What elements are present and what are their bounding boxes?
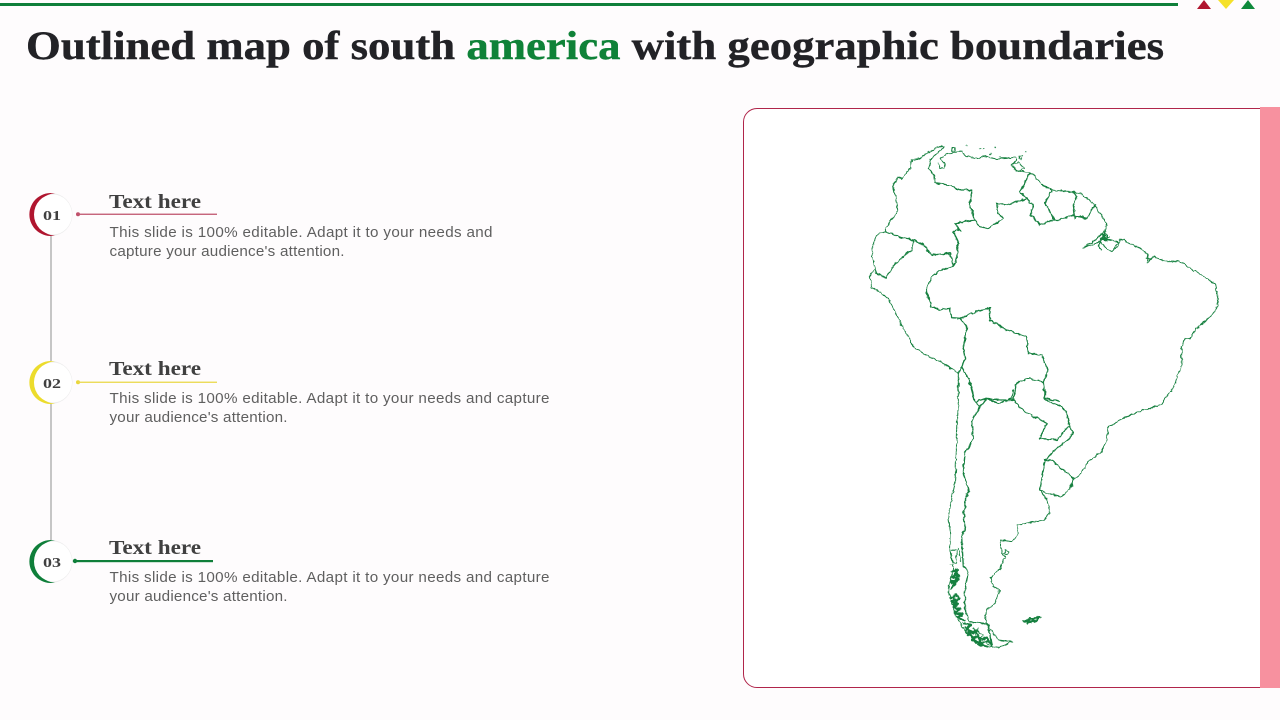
body text 01: capture your audience's attention. (110, 243, 344, 260)
marker 02 (29, 361, 72, 404)
body text 01: This slide is 100% editable. Adapt it to your needs and (110, 224, 492, 241)
marker 03: 03 (43, 556, 61, 571)
title: Outlined map of south america with geographic boundaries (26, 23, 1164, 68)
body text 03: This slide is 100% editable. Adapt it to your needs and capture (110, 569, 550, 586)
Amazon delta (1093, 232, 1151, 262)
pink side bar (1260, 107, 1280, 688)
northern half of the map (869, 146, 1218, 405)
Caribbean islands (952, 146, 1026, 171)
body text 02: your audience's attention. (110, 409, 288, 426)
top green rule (0, 3, 1178, 6)
timeline connector (50, 235, 52, 541)
body text 02 (110, 390, 550, 426)
connector line 03 (73, 559, 213, 563)
coastline south (948, 373, 1161, 648)
item 01 (29, 191, 492, 260)
marker 01: 01 (43, 209, 61, 224)
body text 03: your audience's attention. (110, 588, 288, 605)
item 03 (29, 537, 549, 605)
land borders north (875, 168, 1095, 402)
body text 03 (110, 569, 550, 605)
connector line 01 (76, 212, 217, 216)
marker 01 (29, 193, 72, 236)
icon: three decorative triangles (1197, 0, 1255, 9)
Falkland Islands (1024, 617, 1040, 624)
heading 03: Text here (109, 537, 201, 559)
item 02 (29, 358, 550, 426)
panel: map frame (744, 107, 1280, 688)
southern half of the map (948, 373, 1161, 648)
coastline north (869, 146, 1218, 405)
connector line 02 (76, 380, 217, 384)
land borders south (962, 382, 1073, 647)
marker 02: 02 (43, 377, 61, 392)
marker 03 (29, 540, 72, 583)
Chilean fjords (951, 569, 992, 647)
map: outlined South America (869, 146, 1218, 648)
body text 02: This slide is 100% editable. Adapt it to your needs and capture (110, 390, 550, 407)
body text 01 (110, 224, 492, 260)
heading 02: Text here (109, 358, 201, 380)
heading 01: Text here (109, 191, 201, 213)
